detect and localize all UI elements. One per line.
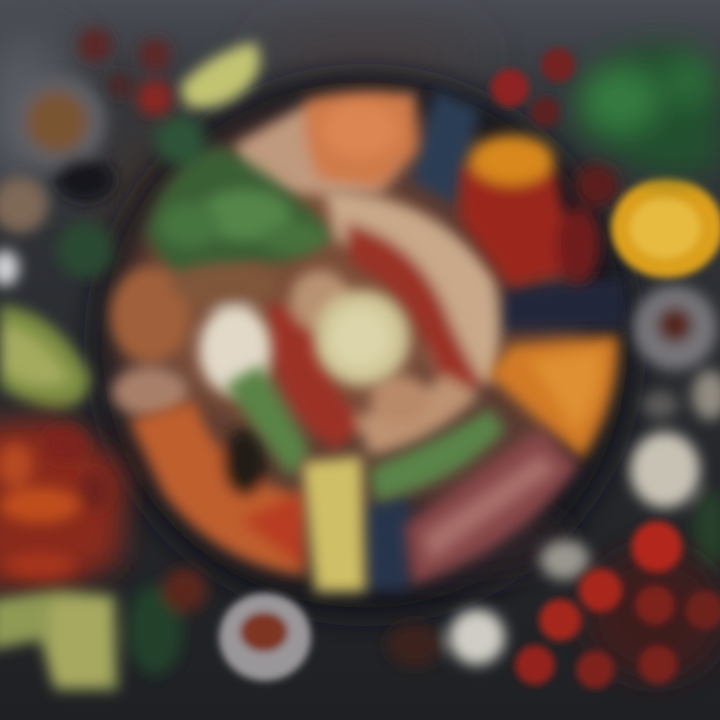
top right dark blue wedge	[365, 90, 625, 590]
left meat	[110, 263, 280, 417]
left small items	[0, 177, 113, 286]
top left sauce bowl	[14, 76, 115, 202]
green wedge right	[370, 408, 505, 502]
top right greens	[575, 43, 720, 175]
platter rim	[93, 73, 637, 617]
green stripe center	[225, 365, 310, 478]
bottom white item	[387, 540, 590, 667]
left red peppers pile	[0, 420, 125, 590]
orange wedge right	[488, 335, 618, 460]
avocado	[0, 305, 90, 408]
top left berries	[78, 28, 173, 116]
top lime wedge	[180, 42, 260, 108]
top right tomatoes	[491, 48, 575, 127]
meat slice lower right	[405, 428, 580, 585]
platter base	[115, 105, 585, 580]
main ring crust	[269, 190, 500, 455]
lower right tomatoes	[515, 521, 720, 689]
yellow block	[302, 456, 366, 592]
center white circle	[314, 290, 410, 386]
orange sweep lower left	[130, 400, 305, 575]
lower left yellow-green vegetables	[0, 568, 207, 690]
bottom sauce bowl	[219, 593, 311, 681]
top salmon food	[235, 91, 418, 195]
right side bowls	[630, 286, 720, 570]
right tall red glass	[460, 135, 619, 288]
table highlights	[0, 30, 480, 270]
left red pepper details	[0, 427, 111, 577]
yellow citrus	[611, 178, 720, 278]
greens centre top	[145, 115, 335, 278]
